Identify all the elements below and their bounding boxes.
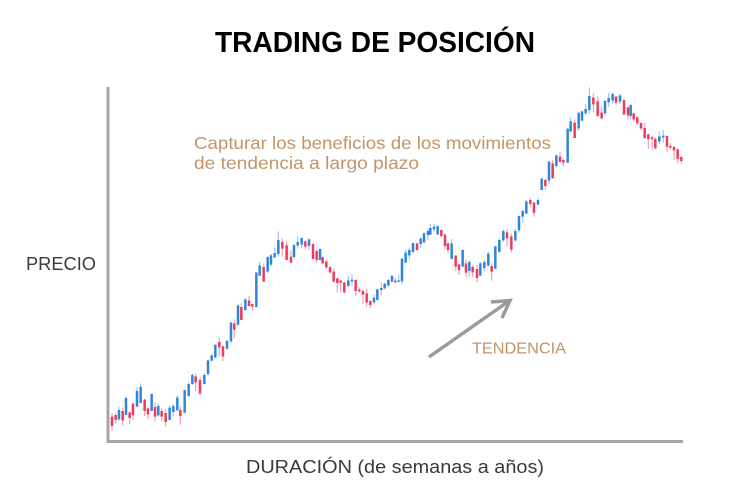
trend arrow [429,300,510,357]
x axis label: DURACIÓN (de semanas a años) [246,456,544,477]
description text: Capturar los beneficios de los movimientos [194,133,551,153]
chart axes [108,87,683,442]
y axis label: PRECIO [26,254,96,274]
description text: de tendencia a largo plazo [194,153,419,173]
title: TRADING DE POSICIÓN [215,25,535,59]
candlestick chart [112,87,681,431]
trend label: TENDENCIA [472,340,566,358]
description text [194,133,551,173]
